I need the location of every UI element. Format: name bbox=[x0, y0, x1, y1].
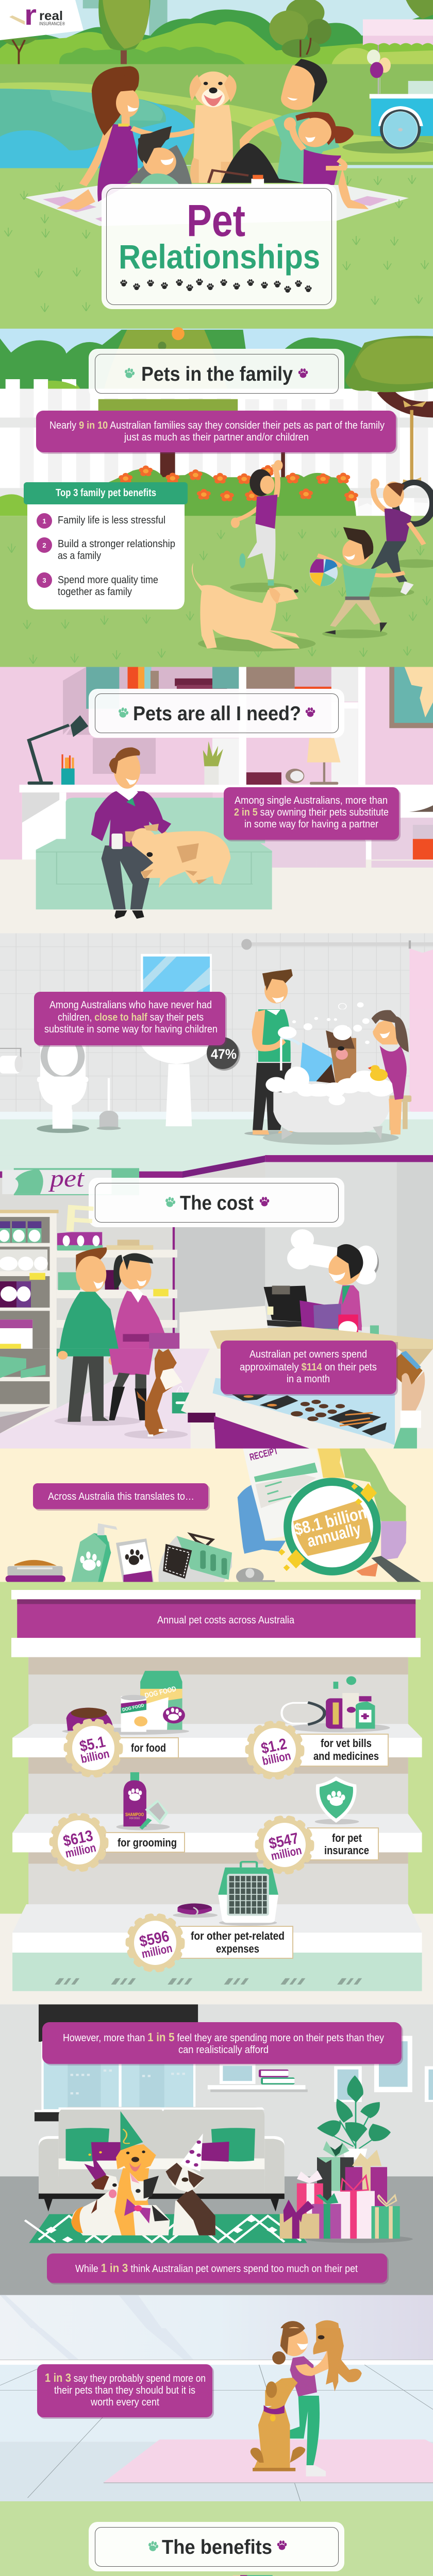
toilet bbox=[37, 1035, 89, 1133]
wall shelf with books bbox=[208, 2070, 308, 2092]
benefit 1 bbox=[37, 513, 165, 529]
tree with oranges bbox=[98, 327, 238, 443]
icon: pet carrier bbox=[218, 1862, 278, 1926]
stat: vet bills spend: and medicines bbox=[313, 1750, 379, 1762]
callout: 2 in 5 single Australians: 2 in 5 say owning their pets substitute bbox=[234, 807, 389, 818]
icon: dog food bag top bbox=[140, 1671, 182, 1692]
panel header bbox=[24, 482, 188, 504]
illustration: shoppers bbox=[59, 1247, 179, 1350]
callout: 1 in 5 overspend bbox=[42, 2022, 403, 2065]
icon: pet food pouch bbox=[116, 1538, 154, 1582]
logo: top Real Insurance bbox=[0, 0, 84, 40]
logo: top Real Insurance: real bbox=[39, 9, 63, 23]
illustration: french bulldog with bow bbox=[124, 2173, 170, 2235]
illustration: chihuahua begging bbox=[137, 1349, 182, 1436]
illustration: golden dog bbox=[190, 72, 237, 183]
patterned rug bbox=[25, 2214, 307, 2243]
illustration: son with ball bbox=[310, 527, 405, 635]
stat: grooming spend bbox=[52, 1816, 185, 1869]
stat: food spend: for food bbox=[131, 1741, 166, 1754]
picnic blanket bbox=[25, 185, 409, 226]
products on shelves bbox=[0, 1221, 169, 1350]
stat: pet insurance spend: for pet bbox=[332, 1832, 362, 1844]
stat: 8.1 billion annually: $8.1 billion bbox=[292, 1503, 369, 1539]
sofa bbox=[39, 2107, 285, 2212]
stat: food spend bbox=[66, 1721, 178, 1775]
stat: vet bills spend: for vet bills bbox=[321, 1737, 372, 1750]
callout: 2 in 5 single Australians: Among single Australians, more than bbox=[235, 795, 388, 806]
section heading: Pets are all I need: Pets are all I need? bbox=[133, 703, 301, 725]
store background bbox=[0, 1155, 433, 1350]
icon text: shampoo label bbox=[125, 1812, 144, 1820]
icon: tall tree bbox=[98, 0, 151, 70]
grass tufts bbox=[8, 529, 430, 664]
icon text: shampoo label: FOR DOGS bbox=[129, 1817, 140, 1820]
shelf ornaments bbox=[246, 738, 341, 785]
benefit 2: 2 bbox=[42, 541, 46, 549]
callout: 2 in 5 single Australians bbox=[224, 787, 401, 841]
stat: grooming spend: for grooming bbox=[118, 1836, 177, 1849]
illustration: woman lifting puppy bbox=[272, 2327, 362, 2477]
tufts of grass bbox=[5, 175, 428, 312]
illustration: bath tub with dog bbox=[263, 1017, 399, 1145]
illustration: cashier bbox=[299, 1244, 379, 1341]
receipt label: RECEIPT bbox=[248, 1446, 279, 1463]
icon text: dog food packaging: DOG FOOD bbox=[144, 1684, 177, 1700]
heading: Pet: Pet bbox=[187, 196, 245, 246]
panel: bathroom scene bbox=[0, 1009, 433, 1352]
illustration: cash register bbox=[264, 1286, 309, 1329]
shelf 2 bbox=[12, 1814, 422, 1863]
section heading: The cost bbox=[89, 1178, 344, 1227]
benefit 3: Spend more quality time bbox=[58, 574, 158, 586]
callout: close to half never had children bbox=[34, 992, 227, 1047]
store lettering: FOOD: F bbox=[62, 1196, 96, 1241]
title card bbox=[102, 184, 337, 309]
stat: pet insurance spend bbox=[258, 1818, 378, 1872]
stat: vet bills spend bbox=[248, 1723, 388, 1777]
icon: shampoo and brush bbox=[116, 1772, 170, 1831]
illustration: man bathing dog bbox=[244, 1009, 308, 1136]
callout: 114 a month bbox=[221, 1341, 398, 1396]
magnifying glass with total bbox=[278, 1478, 421, 1582]
bookcase bbox=[86, 667, 365, 785]
section heading: The benefits bbox=[89, 2522, 344, 2571]
icon: toy mouse bbox=[236, 1568, 275, 1585]
basin bbox=[141, 1044, 212, 1126]
icon: shampoo bottle bbox=[71, 1523, 118, 1582]
callout: 1 in 5 overspend: However, more than 1 in 5 feel they are spending more on their pets than they bbox=[63, 2030, 384, 2044]
benefits background bbox=[0, 2501, 433, 2576]
benefit 2: as a family bbox=[58, 550, 101, 562]
stat: vet bills spend: $1.2 bbox=[260, 1735, 288, 1757]
stat: grooming spend: million bbox=[64, 1841, 97, 1860]
benefit 3: together as family bbox=[58, 586, 132, 598]
benefit 3: 3 bbox=[42, 577, 46, 584]
window bbox=[35, 2005, 198, 2121]
callout: 9 in 10 families: just as much as their partner and/or children bbox=[124, 432, 309, 443]
illustration: beagle with stars hat bbox=[165, 2133, 215, 2235]
icon: food bowl bbox=[6, 1560, 65, 1582]
section heading: The cost: The cost bbox=[180, 1192, 254, 1214]
pencil cup bbox=[61, 754, 75, 785]
gallery background bbox=[0, 2295, 433, 2342]
wall shelf bbox=[176, 2575, 342, 2576]
panel: backyard scene bbox=[0, 327, 433, 668]
icon text: dog food packaging bbox=[122, 1684, 177, 1713]
picket fence bbox=[0, 379, 433, 517]
icon: small left tree bbox=[0, 36, 39, 74]
pet shop sign bbox=[2, 1168, 139, 1195]
bathroom background bbox=[0, 934, 433, 1011]
callout: 1 in 5 overspend: can realistically afford bbox=[178, 2044, 269, 2056]
stat: other expenses spend bbox=[128, 1916, 293, 1970]
illustration: woman with rubber duck bbox=[368, 1010, 411, 1134]
illustration: man on sofa bbox=[91, 748, 177, 919]
illustration: bone sign bbox=[287, 1229, 379, 1284]
ice-cream cart bbox=[342, 20, 433, 154]
callout: 9 in 10 families: Nearly 9 in 10 Australian families say they consider their pets as part of the family bbox=[49, 420, 385, 431]
icon: collar bbox=[173, 1904, 218, 1918]
panel: cost shelves bbox=[0, 1689, 433, 2005]
heading: Relationships: Relationships bbox=[119, 238, 320, 276]
stat: 8.1 billion annually bbox=[292, 1503, 372, 1553]
shadows on lawn bbox=[198, 559, 433, 651]
callout: 1 in 3 worth every cent bbox=[37, 2364, 214, 2419]
panel: family on couch scene bbox=[0, 2575, 433, 2576]
illustration: mother bbox=[57, 66, 214, 210]
callout: 114 a month: in a month bbox=[287, 1374, 330, 1385]
illustration: spotted dog with crown bbox=[71, 2151, 122, 2235]
icon: pet carrier bbox=[158, 1534, 232, 1582]
cream background bbox=[0, 1449, 433, 1582]
icon: dog food bbox=[62, 1689, 189, 1735]
green shopping bag bbox=[172, 1386, 189, 1413]
receipt bbox=[243, 1449, 324, 1539]
panel: party living room scene bbox=[0, 2005, 433, 2345]
illustration: father playing bbox=[370, 479, 424, 595]
stat: pet insurance spend: million bbox=[270, 1843, 303, 1863]
store shelves bbox=[0, 1210, 177, 1352]
shop counter bbox=[179, 1306, 433, 1350]
icon: insurance shield bbox=[315, 1776, 359, 1824]
illustration: son bbox=[127, 126, 192, 185]
benefit 1: Family life is less stressful bbox=[58, 515, 165, 526]
stat: 8.1 billion annually: annually bbox=[305, 1519, 363, 1551]
icon text: dog food packaging: DOG FOOD bbox=[122, 1702, 145, 1713]
panel: living room scene bbox=[0, 667, 433, 1011]
callout: 47 percent: 47% bbox=[211, 1046, 237, 1062]
flower hedge bbox=[105, 465, 358, 516]
counter display bbox=[181, 1349, 433, 1450]
stat: vet bills spend: billion bbox=[261, 1749, 292, 1768]
callout: close to half never had children: Among Australians who have never had bbox=[49, 999, 212, 1011]
illustration: shopper legs bbox=[57, 1349, 153, 1422]
stat: food spend: billion bbox=[79, 1747, 110, 1766]
callout: close to half never had children: substitute in some way for having children bbox=[44, 1024, 218, 1035]
callout: 47 percent bbox=[207, 1037, 240, 1071]
section heading: Pets in the family: Pets in the family bbox=[141, 363, 293, 385]
benefit 2: Build a stronger relationship bbox=[58, 538, 175, 550]
illustration: golden dog with party hat bbox=[105, 2111, 156, 2235]
stat: other expenses spend: for other pet-related bbox=[191, 1929, 285, 1942]
callout: 1 in 3 worth every cent: their pets than they should but it is bbox=[54, 2385, 195, 2396]
wall frames bbox=[220, 2036, 433, 2102]
illustration: mother playing bbox=[231, 460, 283, 586]
illustration: playful dog bbox=[192, 563, 299, 649]
pink floor mat bbox=[104, 2439, 433, 2483]
callout: 1 in 3 worth every cent: worth every cent bbox=[90, 2397, 159, 2408]
callout: 1 in 3 too much: While 1 in 3 think Australian pet owners spend too much on their pet bbox=[75, 2261, 358, 2275]
houseplant bbox=[317, 2075, 391, 2160]
shelf 1 bbox=[12, 1724, 422, 1774]
gift pile bbox=[280, 2141, 400, 2239]
icon: vet kit bbox=[281, 1693, 390, 1732]
illustration: sitting dog bbox=[251, 2378, 305, 2471]
benefit 2 bbox=[37, 537, 175, 562]
floor and shelf 3 bbox=[0, 1904, 433, 2005]
callout: 114 a month: Australian pet owners spend bbox=[249, 1349, 367, 1360]
illustration: father bbox=[221, 59, 340, 183]
callout: 2 in 5 single Australians: in some way for having a partner bbox=[244, 819, 378, 830]
illustration: woman hair top bbox=[279, 2320, 341, 2345]
benefit 3 bbox=[37, 572, 158, 598]
panel: hero picnic scene bbox=[0, 0, 433, 330]
wall map bbox=[389, 667, 433, 728]
pot plant bbox=[203, 741, 223, 785]
australia map bbox=[238, 1449, 407, 1577]
green section background bbox=[0, 1582, 433, 1692]
illustration: sleeping dog bbox=[125, 824, 230, 888]
desk lamp bbox=[28, 715, 88, 785]
section heading: Pets in the family bbox=[89, 349, 344, 398]
sofa bbox=[36, 798, 272, 909]
benefit 1: 1 bbox=[42, 517, 46, 525]
stat: other expenses spend: expenses bbox=[216, 1942, 259, 1955]
stat: other expenses spend: $596 bbox=[138, 1927, 171, 1951]
panel: top 3 family pet benefits bbox=[24, 482, 188, 609]
callout: 9 in 10 families bbox=[36, 411, 397, 454]
shop floor bbox=[0, 1349, 309, 1449]
callout: across Australia: Across Australia this translates to… bbox=[48, 1491, 194, 1502]
toilet roll bbox=[0, 1048, 23, 1074]
section heading: Pets are all I need bbox=[89, 689, 344, 738]
callout: across Australia bbox=[33, 1483, 210, 1511]
picnic basket bbox=[208, 170, 264, 187]
icon: round tree bbox=[269, 0, 331, 58]
right tree with tyre swing bbox=[345, 336, 433, 524]
illustration: daughter bbox=[284, 112, 369, 209]
stat: other expenses spend: million bbox=[140, 1941, 173, 1961]
panel: pet store lower scene bbox=[0, 1349, 433, 1692]
callout: 1 in 3 worth every cent: 1 in 3 say they probably spend more on bbox=[45, 2371, 206, 2384]
stat: pet insurance spend: insurance bbox=[324, 1844, 369, 1857]
heading: annual pet costs: Annual pet costs across Australia bbox=[157, 1615, 295, 1626]
icon text: shampoo label: SHAMPOO bbox=[125, 1812, 144, 1817]
illustration: man head bathing dog bbox=[262, 969, 364, 1009]
callout: close to half never had children: children, close to half say their pets bbox=[58, 1012, 204, 1023]
illustration: hand with wallet bbox=[385, 1349, 433, 1449]
callout: 1 in 3 too much bbox=[47, 2253, 389, 2284]
pond bbox=[0, 89, 194, 181]
logo: top Real Insurance: INSURANCE® bbox=[39, 21, 65, 26]
stat: food spend: $5.1 bbox=[78, 1733, 107, 1755]
store sign text: pet bbox=[48, 1165, 85, 1192]
panel header: Top 3 family pet benefits bbox=[56, 487, 156, 499]
toilet brush bbox=[96, 1078, 121, 1130]
panel: gallery scene bbox=[0, 2327, 433, 2576]
section heading: The benefits: The benefits bbox=[162, 2536, 272, 2558]
stat: grooming spend: $613 bbox=[62, 1827, 94, 1850]
icon: stethoscope top bbox=[334, 1676, 356, 1692]
shelf unit top bbox=[11, 1590, 421, 1692]
callout: 114 a month: approximately $114 on their pets bbox=[240, 1362, 377, 1373]
paw print trail bbox=[120, 279, 312, 293]
stat: pet insurance spend: $547 bbox=[268, 1829, 300, 1853]
